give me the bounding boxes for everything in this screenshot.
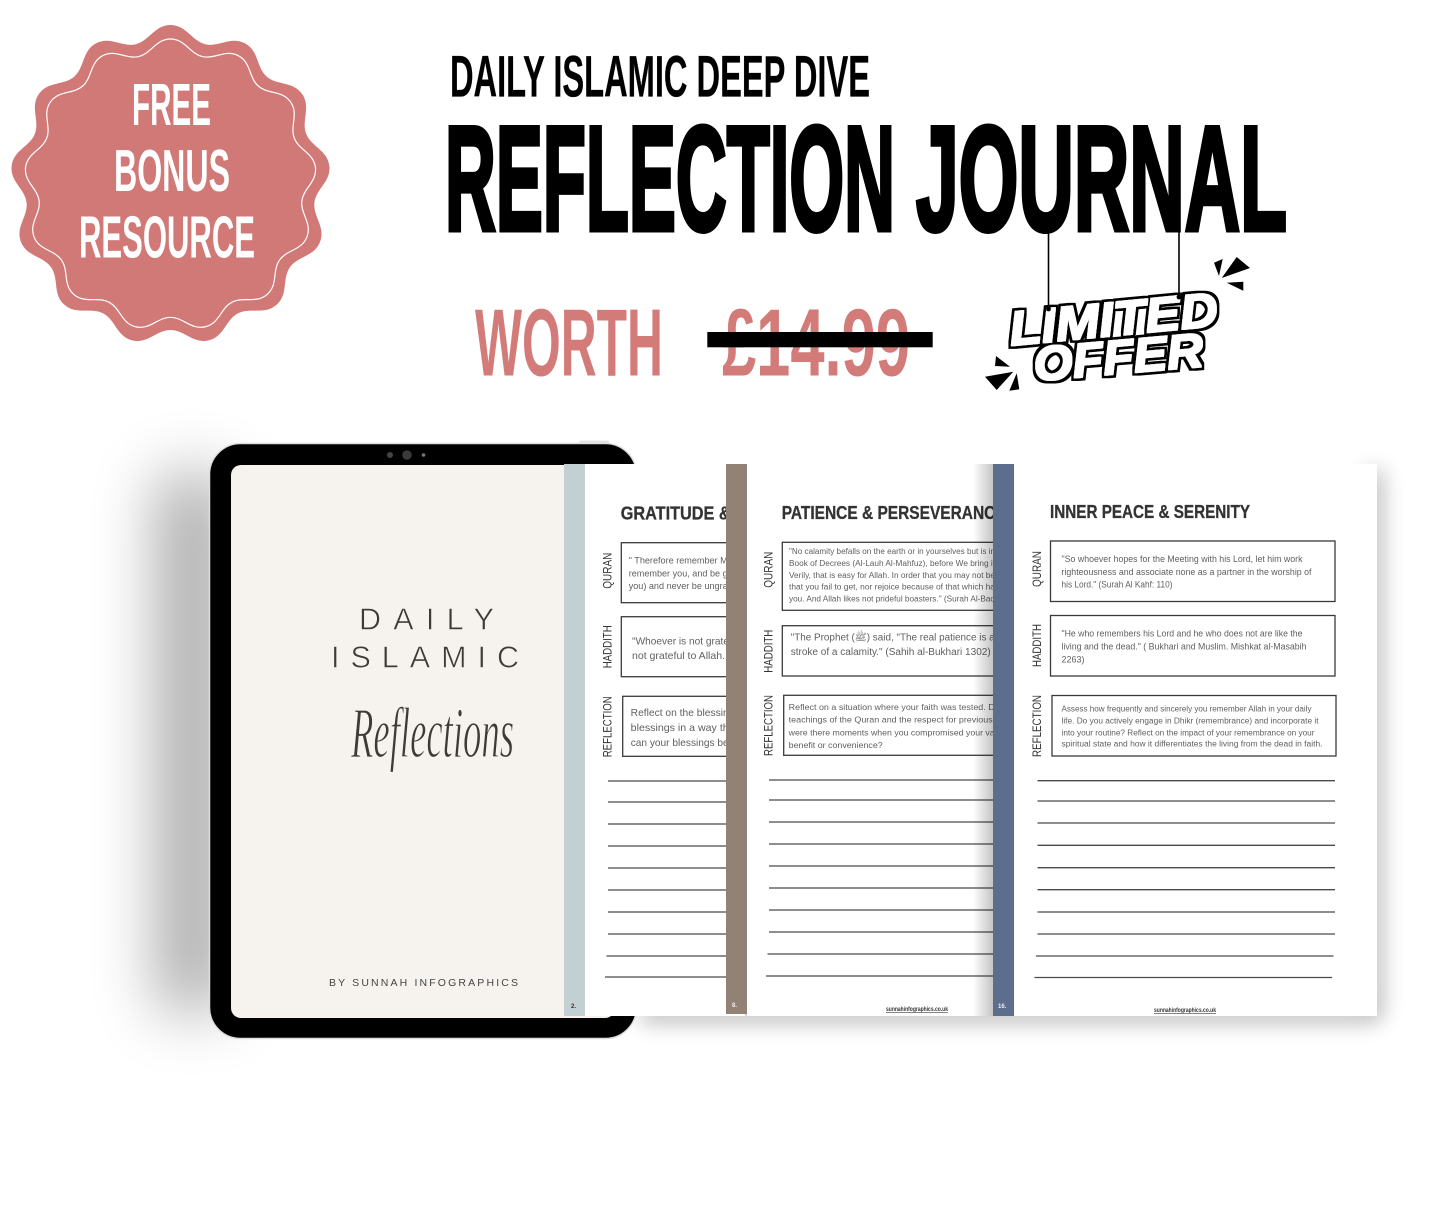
page: gratitude xyxy=(564,464,753,1016)
tablet cameras xyxy=(387,450,425,460)
page number: 8. xyxy=(732,1003,737,1009)
page sheet xyxy=(1014,464,1377,1016)
reflection row: Reflect on the blessin xyxy=(631,708,729,719)
burst marks xyxy=(985,257,1250,391)
reflection row: life. Do you actively engage in Dhikr (remembrance) and incorporate it xyxy=(1062,716,1319,726)
cover title: ISLAMIC xyxy=(331,641,519,675)
hadith row: HADDITH xyxy=(603,625,615,668)
page spine xyxy=(564,464,585,1016)
limited and offer lettering xyxy=(1007,284,1220,392)
tablet xyxy=(210,440,636,1038)
hadith row: "Whoever is not grate xyxy=(632,636,729,647)
reflection row: teachings of the Quran and the respect for previous xyxy=(789,715,993,725)
cover byline: BY SUNNAH INFOGRAPHICS xyxy=(329,977,518,989)
reflection row: spiritual state and how it differentiates the living from the dead in faith. xyxy=(1062,740,1322,749)
price: struck through amount xyxy=(707,290,933,396)
writing lines xyxy=(605,781,740,977)
title: reflection journal: REFLECTION xyxy=(445,95,895,262)
reflection row: REFLECTION xyxy=(763,695,775,756)
reflection row xyxy=(1032,695,1336,757)
hadith row: "The Prophet (ﷺ) said, "The real patience is a xyxy=(791,630,995,644)
badge text: RESOURCE xyxy=(79,204,255,270)
reflection row: into your routine? Reflect on the impact of your remembrance on your xyxy=(1062,728,1315,738)
heading: daily islamic deep dive: DAILY ISLAMIC DEEP DIVE xyxy=(450,44,870,110)
quran row: "So whoever hopes for the Meeting with his Lord, let him work xyxy=(1062,554,1303,564)
hadith row: HADDITH xyxy=(1032,624,1044,667)
quran row xyxy=(1032,541,1335,602)
page spine xyxy=(726,464,747,1014)
page sheet xyxy=(747,464,1007,1016)
offer text: OFFER xyxy=(1031,324,1206,392)
hadith row xyxy=(603,617,751,677)
quran row: Verily, that is easy for Allah. In order that you may not be xyxy=(789,571,995,580)
reflection row: were there moments when you compromised your va xyxy=(788,727,995,737)
quran row: QURAN xyxy=(603,553,615,589)
page heading: INNER PEACE & SERENITY xyxy=(1050,502,1250,522)
reflection row: can your blessings be xyxy=(631,738,729,749)
hadith row: living and the dead." ( Bukhari and Muslim. Mishkat al-Masabih xyxy=(1062,642,1306,652)
hadith row xyxy=(1032,616,1335,676)
quran row: QURAN xyxy=(1032,551,1044,587)
reflection row xyxy=(603,696,753,757)
quran row: Book of Decrees (Al-Lauh Al-Mahfuz), before We bring it xyxy=(789,559,996,568)
cover title: DAILY xyxy=(359,602,494,636)
quran row: QURAN xyxy=(763,552,775,588)
reflection row: blessings in a way th xyxy=(631,723,729,734)
quran row xyxy=(603,543,751,603)
page footer url: sunnahinfographics.co.uk xyxy=(886,1007,949,1013)
quran row: his Lord." (Surah Al Kahf: 110) xyxy=(1062,580,1172,590)
tablet shadow xyxy=(158,475,228,1010)
badge text xyxy=(79,72,255,270)
badge text: FREE xyxy=(132,72,211,138)
quran row xyxy=(763,542,1012,610)
badge inner outline xyxy=(25,39,316,327)
sign pins xyxy=(1046,295,1181,311)
quran row: you. And Allah likes not prideful boasters." (Surah Al-Bad xyxy=(789,594,995,603)
cover script word: Reflections xyxy=(350,693,514,774)
page heading: PATIENCE & PERSEVERANCE xyxy=(782,503,1006,523)
badge text: BONUS xyxy=(114,138,230,204)
hanging limited offer sign xyxy=(985,230,1250,392)
hadith row: "He who remembers his Lord and he who does not are like the xyxy=(1062,629,1302,639)
page heading: GRATITUDE & xyxy=(621,503,731,523)
page footer url: sunnahinfographics.co.uk xyxy=(1154,1008,1217,1014)
quran row: "No calamity befalls on the earth or in yourselves but is in xyxy=(789,547,995,556)
sign strings xyxy=(1048,230,1179,308)
price: struck through amount: £14.99 xyxy=(722,290,910,396)
reflection row xyxy=(763,695,1014,756)
hadith row: not grateful to Allah. xyxy=(632,651,725,662)
quran row: remember you, and be g xyxy=(629,568,728,578)
reflection row: benefit or convenience? xyxy=(789,740,883,750)
tablet power button xyxy=(579,440,609,446)
writing lines xyxy=(766,780,1000,976)
reflection row: Reflect on a situation where your faith was tested. D xyxy=(789,702,995,712)
hadith row: HADDITH xyxy=(763,630,775,673)
reflection row: Assess how frequently and sincerely you remember Allah in your daily xyxy=(1062,705,1312,714)
pages shadow xyxy=(640,470,1382,1022)
quran row: you) and never be ungra xyxy=(629,581,729,591)
page sheet xyxy=(585,464,745,1016)
limited text: LIMITED xyxy=(1007,284,1220,356)
page spine xyxy=(993,464,1014,1016)
page number: 16. xyxy=(998,1004,1007,1010)
badge scalloped shape xyxy=(12,25,329,341)
quran row: that you fail to get, nor rejoice because of that which ha xyxy=(789,583,996,592)
page number: 2. xyxy=(571,1004,576,1010)
page: inner peace xyxy=(993,464,1377,1016)
cover title xyxy=(331,602,519,675)
quran row: righteousness and associate none as a partner in the worship of xyxy=(1062,567,1312,577)
hadith row: stroke of a calamity." (Sahih al-Bukhari 1302) xyxy=(791,647,991,658)
page: patience xyxy=(726,464,1014,1016)
reflection row: REFLECTION xyxy=(1032,695,1044,757)
page fold shading xyxy=(973,464,993,1016)
hadith row xyxy=(763,626,1012,676)
writing lines xyxy=(1034,781,1335,978)
hadith row: 2263) xyxy=(1062,655,1084,665)
tablet screen xyxy=(231,465,615,1018)
price: worth: WORTH xyxy=(475,290,663,396)
reflection row: REFLECTION xyxy=(603,696,615,757)
tablet body xyxy=(210,444,636,1038)
quran row: " Therefore remember M xyxy=(629,555,728,565)
badge: free bonus resource xyxy=(12,25,329,341)
